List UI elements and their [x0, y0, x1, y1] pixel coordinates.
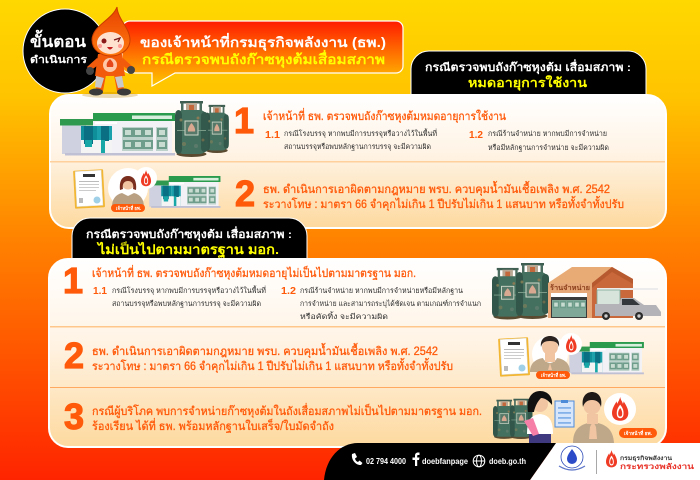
step 1	[234, 100, 609, 152]
step 3: กรณีผู้บริโภค พบการจำหน่ายก๊าซหุงต้มในถังเสื่อมสภาพไม่เป็นไปตามมาตรฐาน มอก.	[92, 403, 482, 418]
step 2: 2	[64, 335, 84, 376]
step 1: 1	[63, 260, 83, 301]
step 1: 1.2	[281, 285, 296, 297]
icon: globe	[473, 455, 485, 467]
logo: ministry wordmark: กรมธุรกิจพลังงาน	[620, 455, 672, 462]
step 1: หรือคัดทิ้ง จะมีความผิด	[300, 311, 388, 321]
step 2: ธพ. ดำเนินการเอาผิดตามกฎหมาย พรบ. ควบคุมน้ำมันเชื้อเพลิง พ.ศ. 2542	[263, 181, 610, 196]
panel: expired cylinders	[50, 95, 666, 228]
badge: process steps circle	[23, 9, 107, 93]
header speech bubble: กรณีตรวจพบถังก๊าซหุงต้มเสื่อมสภาพ	[142, 49, 385, 68]
badge: process steps circle: ขั้นตอน	[30, 29, 86, 51]
badge: process steps circle: ดำเนินการ	[30, 54, 88, 66]
illustration: store and cylinders	[60, 101, 229, 157]
step 1: กรณีโรงบรรจุ หากพบมีการบรรจุหรือวางไว้ในพื้นที่	[284, 128, 437, 138]
logo: department seal	[559, 446, 585, 470]
icon: phone	[352, 453, 362, 465]
icon: facebook	[412, 452, 420, 466]
header speech bubble: ของเจ้าหน้าที่กรมธุรกิจพลังงาน (ธพ.)	[140, 32, 386, 51]
step 2	[235, 173, 624, 214]
step 2: ระวางโทษ : มาตรา 66 จำคุกไม่เกิน 1 ปีปรับไม่เกิน 1 แสนบาท หรือทั้งจำทั้งปรับ	[263, 196, 624, 211]
step 1: 1.1	[93, 285, 107, 297]
step 1: กรณีร้านจำหน่าย หากพบมีการจำหน่ายหรือมีหลักฐาน	[300, 286, 463, 295]
illustration: document, officer, store	[498, 333, 644, 379]
footer: contact bar	[324, 443, 556, 480]
illustration: document, officer, store: เจ้าหน้าที่ ธพ.	[541, 371, 567, 379]
step 1: การจำหน่าย และสามารถระบุได้ชัดเจน ตามเกณฑ์การจำแนก	[300, 299, 481, 308]
step 1: เจ้าหน้าที่ ธพ. ตรวจพบถังก๊าซหุงต้มหมดอายุการใช้งาน	[263, 108, 506, 123]
panel: non-standard cylinders	[49, 259, 666, 447]
logo: ministry wordmark: กระทรวงพลังงาน	[620, 462, 695, 471]
black tab: expired cylinders	[411, 51, 646, 96]
step 2: ธพ. ดำเนินการเอาผิดตามกฎหมาย พรบ. ควบคุมน้ำมันเชื้อเพลิง พ.ศ. 2542	[92, 343, 438, 358]
step 1: 1	[234, 100, 254, 141]
facebook page name: doebfanpage	[422, 457, 469, 466]
step 1: กรณีร้านจำหน่าย หากพบมีการจำหน่าย	[488, 129, 607, 138]
mascot	[82, 7, 138, 98]
step 1: 1.2	[469, 129, 483, 141]
step 2	[64, 335, 453, 376]
step 3: ร้องเรียน ได้ที่ ธพ. พร้อมหลักฐานใบเสร็จ/ใบมัดจำถัง	[92, 418, 334, 433]
logo: ministry wordmark	[606, 450, 695, 471]
illustration: document, officer, store: เจ้าหน้าที่ ธพ.	[116, 204, 142, 212]
step 2: 2	[235, 173, 255, 214]
black tab: non-standard cylinders: ไม่เป็นไปตามมาตรฐาน มอก.	[96, 240, 279, 259]
illustration: cylinders, shop and pickup truck: ร้านจำหน่าย	[550, 283, 590, 292]
illustration: document, officer, store	[73, 167, 220, 212]
step 1	[63, 260, 481, 321]
step 1: เจ้าหน้าที่ ธพ. ตรวจพบถังก๊าซหุงต้มหมดอายุไม่เป็นไปตามมาตรฐาน มอก.	[92, 265, 416, 280]
step 3	[64, 396, 482, 437]
footer: white logo strip	[530, 443, 700, 480]
step 3: 3	[64, 396, 84, 437]
website: doeb.go.th	[489, 457, 526, 466]
step 1: สถานบรรจุหรือพบหลักฐานการบรรจุ จะมีความผิด	[112, 299, 261, 308]
black tab: non-standard cylinders	[72, 218, 307, 260]
black tab: expired cylinders: กรณีตรวจพบถังก๊าซหุงต้ม เสื่อมสภาพ :	[425, 59, 631, 75]
illustration: consumer, clipboard, officer	[493, 391, 657, 444]
phone number: 02 794 4000	[366, 457, 406, 466]
black tab: expired cylinders: หมดอายุการใช้งาน	[468, 75, 588, 91]
illustration: cylinders, shop and pickup truck	[492, 263, 661, 320]
step 1: 1.1	[265, 129, 280, 141]
step 1: สถานบรรจุหรือพบหลักฐานการบรรจุ จะมีความผิด	[284, 142, 431, 151]
step 1: หรือมีหลักฐานการจำหน่าย จะมีความผิด	[488, 143, 609, 152]
header speech bubble	[122, 21, 403, 86]
illustration: consumer, clipboard, officer: เจ้าหน้าที่ ธพ.	[624, 429, 653, 437]
black tab: non-standard cylinders: กรณีตรวจพบถังก๊าซหุงต้ม เสื่อมสภาพ :	[86, 226, 292, 242]
step 1: กรณีโรงบรรจุ หากพบมีการบรรจุหรือวางไว้ในพื้นที่	[112, 285, 266, 295]
step 2: ระวางโทษ : มาตรา 66 จำคุกไม่เกิน 1 ปีปรับไม่เกิน 1 แสนบาท หรือทั้งจำทั้งปรับ	[92, 358, 453, 373]
